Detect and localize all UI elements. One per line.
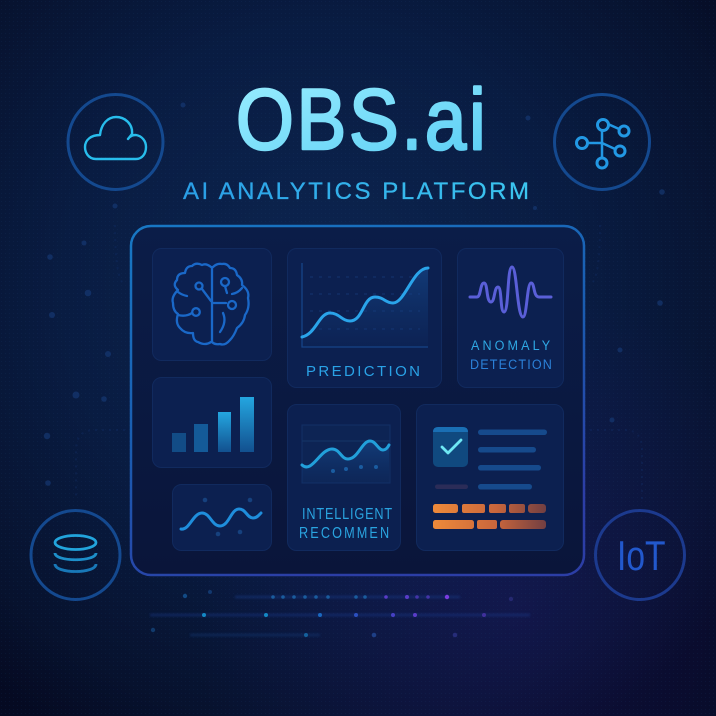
waveform [470,267,551,317]
panel: anomaly detection card [458,248,564,388]
label: anomaly detection: DETECTION [470,356,552,372]
line chart [302,263,428,347]
text lines [435,430,547,490]
icon: checkbox [433,427,468,467]
label: prediction: PREDICTION [306,363,420,380]
icon: cloud [68,94,163,190]
label: anomaly detection: ANOMALY [471,337,550,353]
icon: IoT [596,510,684,600]
icon: network tree [554,94,650,190]
title: OBS.ai [236,72,488,168]
panel: bar chart card [152,378,272,468]
icon: brain [173,264,249,344]
subtitle: AI ANALYTICS PLATFORM [183,178,529,205]
panel: prediction card [288,248,442,388]
panel: intelligent recommendation card [288,404,400,550]
icon: IoT: IoT [617,534,666,580]
panel: small wave card [172,484,272,550]
label: intelligent recommen [299,506,393,542]
label: intelligent recommen: RECOMMEN [299,525,389,542]
area chart [302,425,390,483]
panel: checklist card [416,404,564,550]
bottom dotted data streams [150,590,530,637]
orange bars [433,504,546,529]
panel: dashboard [131,226,584,575]
icon: database [31,510,120,600]
bar chart [172,397,254,452]
label: intelligent recommen: INTELLIGENT [302,506,393,523]
wave line [181,509,261,529]
label: anomaly detection [470,337,552,372]
panel: brain card [152,248,272,360]
